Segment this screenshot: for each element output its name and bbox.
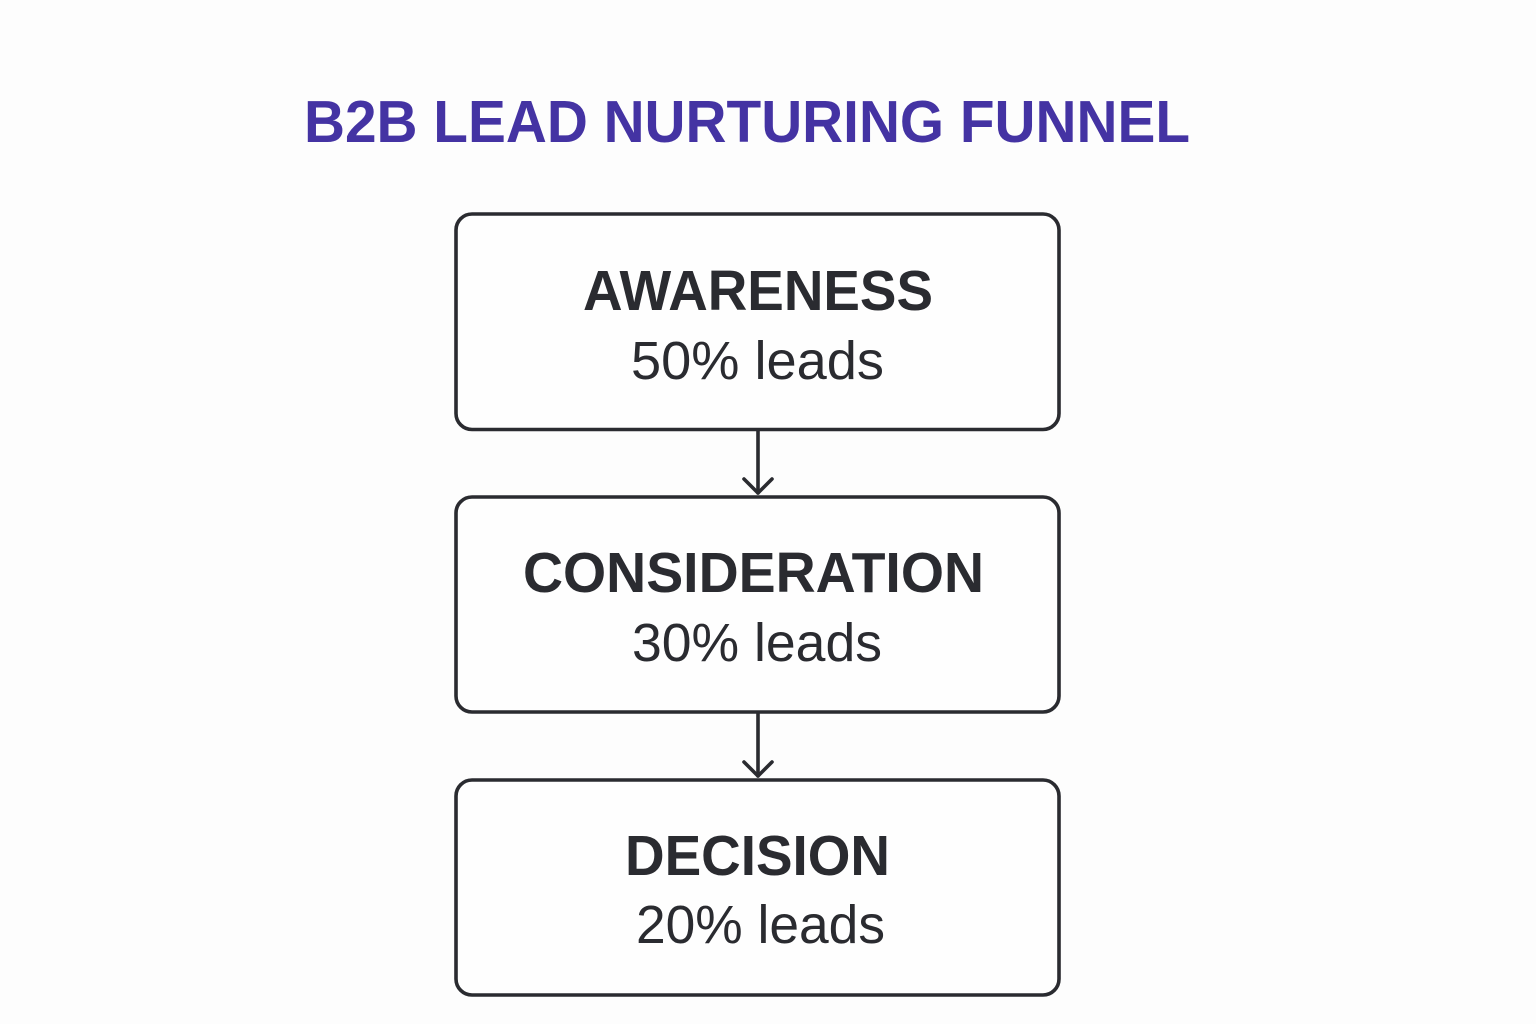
heading: awareness: AWARENESS — [583, 259, 933, 323]
panel: consideration — [456, 497, 1059, 712]
text: 20% leads: 20% leads — [636, 895, 885, 955]
text: 30% leads: 30% leads — [632, 613, 882, 673]
panel: decision — [456, 780, 1059, 995]
text: 50% leads: 50% leads — [631, 331, 884, 391]
arrow: awareness to consideration — [744, 431, 772, 493]
heading: consideration: CONSIDERATION — [523, 541, 984, 605]
arrow: consideration to decision — [744, 713, 772, 776]
panel: awareness — [456, 214, 1059, 430]
heading: decision: DECISION — [625, 824, 890, 888]
title: B2B LEAD NURTURING FUNNEL — [304, 89, 1190, 155]
